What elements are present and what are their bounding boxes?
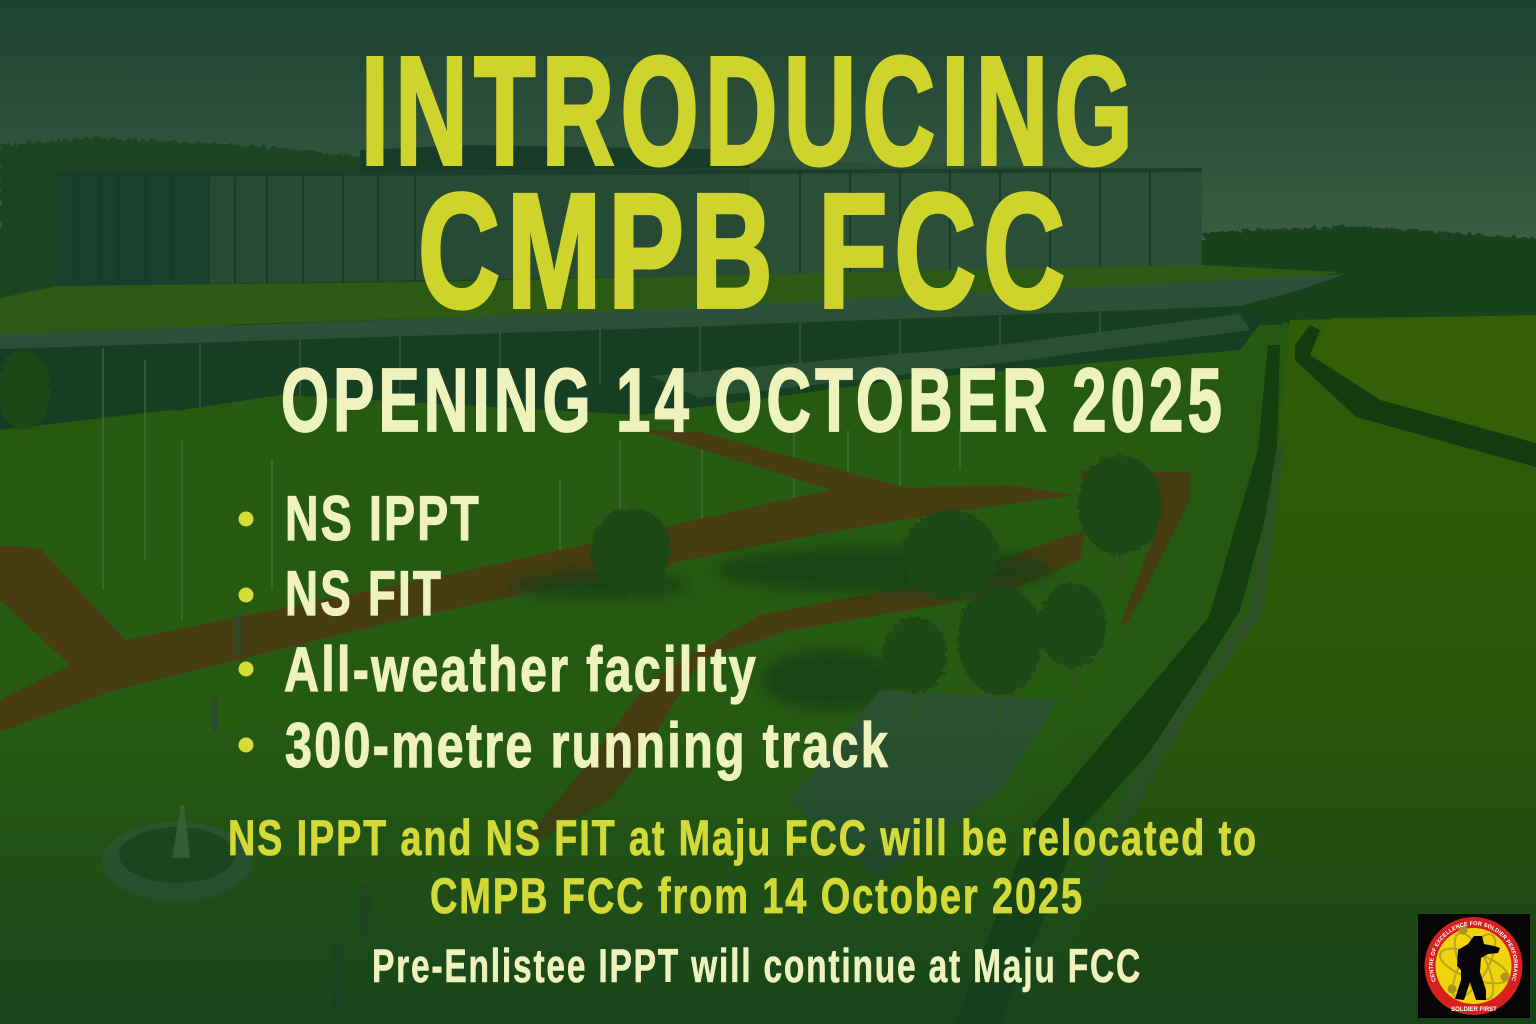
glazed lower level [0,308,1265,430]
bullet item: NS IPPT [238,484,481,554]
title: CMPB FCC [418,159,1072,342]
thin vertical poles [103,348,960,620]
lower lawn [0,350,1240,1024]
people [212,615,370,1010]
embankment and far fields [900,322,1300,1024]
brick paths [0,380,1260,853]
relocation notice [228,810,1258,924]
bullet item: NS IPPT: NS IPPT [285,484,481,554]
bullet item: running track: 300-metre running track [285,711,890,781]
bullet item: NS FIT: NS FIT [285,559,443,629]
title [361,25,1139,342]
plaza [790,690,1058,880]
logo: Centre of Excellence for Soldier Performance: SOLDIER FIRST [1451,1007,1497,1013]
bullet item: NS FIT [238,559,443,629]
soldier silhouette [1455,936,1500,1000]
tree shadows [510,548,1055,710]
feature list [238,484,890,781]
canopy edge [0,274,1345,349]
bottom vignette [0,720,1536,1024]
green roof [0,265,1340,332]
title: INTRODUCING [361,25,1139,197]
relocation notice: CMPB FCC from 14 October 2025 [430,868,1084,924]
tree trunks [28,415,1123,735]
trees [0,350,1162,695]
bullet item: all-weather facility: All-weather facility [284,635,758,705]
pre-enlistee note: Pre-Enlistee IPPT will continue at Maju FCC [372,939,1142,992]
logo ring text [1433,925,1514,981]
logo: Centre of Excellence for Soldier Performance: CENTRE OF EXCELLENCE FOR SOLDIER PERFORMANCE [1429,921,1518,982]
building facade [57,168,1202,286]
fountain [102,805,252,902]
